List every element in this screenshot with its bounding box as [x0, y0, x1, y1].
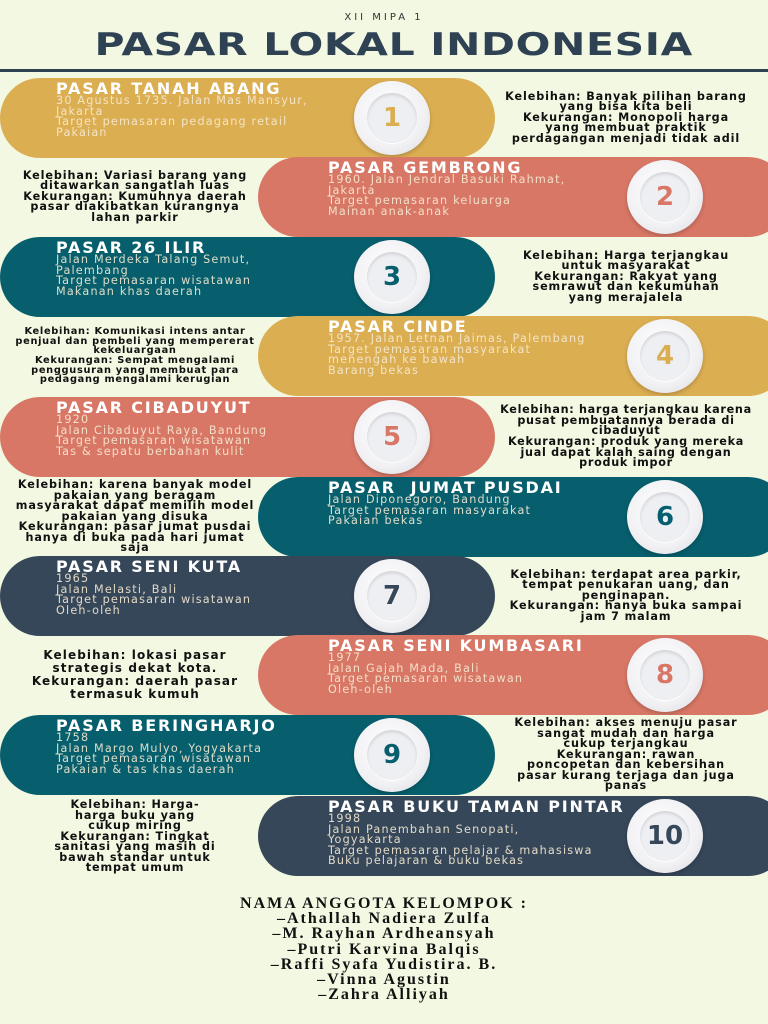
- text: pasar 6 notes: pakaian yang disuka: [61, 510, 209, 523]
- panel: pasar 10: 10: [647, 821, 683, 851]
- text: pasar 7 notes: Kekurangan: hanya buka sampai: [510, 599, 742, 612]
- text: pasar 2 notes: [23, 169, 247, 224]
- panel: pasar 4: Target pemasaran masyarakat: [328, 342, 531, 356]
- text: pasar 3 notes: yang merajalela: [569, 291, 683, 304]
- panel: pasar 5: Tas & sepatu berbahan kulit: [56, 444, 245, 458]
- text: pasar 1 notes: yang membuat praktik: [545, 121, 707, 134]
- panel: pasar 1: Target pemasaran pedagang retail: [56, 115, 287, 128]
- panel: pasar 7: 7: [383, 581, 401, 611]
- text: pasar 8 notes: Kelebihan: lokasi pasar: [43, 648, 227, 662]
- panel: pasar 10: Yogyakarta: [328, 833, 402, 846]
- panel: pasar 10: PASAR BUKU TAMAN PINTAR: [328, 797, 624, 816]
- text: pasar 5 notes: Kekurangan: produk yang mereka: [508, 435, 744, 448]
- panel: pasar 8: Target pemasaran wisatawan: [328, 672, 523, 685]
- text: pasar 10 notes: Kekurangan: Tingkat: [60, 830, 210, 843]
- text: pasar 4 notes: penjual dan pembeli yang mempererat: [15, 336, 255, 347]
- text: pasar 8 notes: strategis dekat kota.: [53, 661, 217, 675]
- panel: pasar 10: Jalan Panembahan Senopati,: [328, 822, 519, 836]
- panel: pasar 6: PASAR JUMAT PUSDAI: [328, 478, 563, 497]
- panel: pasar 1: PASAR TANAH ABANG: [56, 79, 281, 98]
- panel: pasar 7: Oleh-oleh: [56, 604, 121, 616]
- text: pasar 1 notes: yang bisa kita beli: [559, 100, 693, 113]
- panel: pasar 8: [258, 635, 768, 715]
- text: pasar 2 notes: pasar diakibatkan kurangnya: [30, 200, 240, 213]
- header rule: [0, 69, 768, 72]
- panel: pasar 4: 4: [656, 341, 674, 371]
- panel: pasar 1: 30 Agustus 1735. Jalan Mas Mansyur,: [56, 94, 308, 107]
- panel: pasar 3: PASAR 26 ILIR: [56, 238, 206, 257]
- panel: pasar 5: 1920: [56, 413, 89, 426]
- panel: pasar 1: [0, 78, 495, 158]
- panel: pasar 4: 1957. Jalan Letnan Jaimas, Palembang: [328, 332, 586, 345]
- text: pasar 9 notes: [514, 716, 738, 792]
- panel: pasar 6: 6: [656, 502, 674, 532]
- panel: pasar 9: 1758: [56, 731, 89, 744]
- text: group members: –Athallah Nadiera Zulfa: [277, 910, 491, 927]
- text: pasar 5 notes: Kelebihan: harga terjangkau karena: [500, 403, 752, 416]
- text: pasar 3 notes: semrawut dan kekumuhan: [533, 280, 719, 293]
- text: group members: –Zahra Alliyah: [318, 986, 450, 1003]
- panel: pasar 7: [0, 556, 495, 636]
- panel: pasar 4: PASAR CINDE: [328, 317, 468, 336]
- panel: pasar 2: 1960. Jalan Jendral Basuki Rahmat,: [328, 173, 565, 186]
- panel: pasar 7: Jalan Melasti, Bali: [56, 582, 177, 596]
- panel: pasar 5: Target pemasaran wisatawan: [56, 434, 251, 447]
- panel: pasar 1: Jakarta: [56, 104, 104, 118]
- panel: pasar 9: [0, 715, 495, 795]
- text: pasar 1 notes: [505, 90, 747, 145]
- text: pasar 10 notes: sanitasi yang masih di: [54, 840, 216, 853]
- text: pasar 4 notes: [15, 326, 255, 385]
- panel: pasar 7: PASAR SENI KUTA: [56, 557, 242, 576]
- panel: pasar 9: PASAR BERINGHARJO: [56, 716, 277, 735]
- text: pasar 5 notes: jual dapat kalah saing dengan: [520, 446, 731, 459]
- text: group members: –Vinna Agustin: [317, 971, 451, 988]
- panel: pasar 2: Mainan anak-anak: [328, 204, 450, 218]
- text: pasar 8 notes: [32, 648, 238, 701]
- text: pasar 7 notes: [510, 568, 742, 623]
- panel: pasar 4: Barang bekas: [328, 364, 419, 376]
- panel: pasar 3: 3: [383, 262, 401, 292]
- text: group members: [240, 895, 528, 1003]
- text: pasar 10 notes: harga buku yang: [75, 809, 195, 822]
- text: pasar 9 notes: cukup terjangkau: [563, 737, 689, 750]
- text: pasar 7 notes: tempat penukaran uang, dan: [522, 578, 730, 591]
- panel: pasar 6: Pakaian bekas: [328, 514, 423, 527]
- text: pasar 9 notes: Kelebihan: akses menuju pasar: [514, 716, 738, 729]
- text: pasar 1 notes: Kekurangan: Monopoli harga: [523, 111, 729, 124]
- panel: pasar 10: 1998: [328, 812, 361, 825]
- text: pasar 6 notes: masyarakat dapat memilih model: [16, 499, 254, 512]
- panel: pasar 5: PASAR CIBADUYUT: [56, 398, 251, 417]
- panel: pasar 10: [258, 796, 768, 876]
- panel: pasar 8: 8: [656, 660, 674, 690]
- text: pasar 7 notes: penginapan.: [582, 589, 670, 602]
- text: pasar 7 notes: Kelebihan: terdapat area parkir,: [510, 568, 742, 581]
- panel: pasar 7: 1965: [56, 572, 89, 585]
- text: pasar 4 notes: kekeluargaan: [93, 345, 177, 356]
- text: pasar 3 notes: untuk masyarakat: [561, 259, 691, 272]
- text: pasar 6 notes: Kekurangan: pasar jumat pusdai: [19, 520, 251, 533]
- text: pasar 7 notes: jam 7 malam: [581, 610, 671, 623]
- panel: pasar 5: Jalan Cibaduyut Raya, Bandung: [56, 424, 267, 436]
- panel: pasar 2: [258, 157, 768, 237]
- text: pasar 3 notes: Kekurangan: Rakyat yang: [534, 270, 718, 283]
- text: pasar 9 notes: poncopetan dan kebersihan: [527, 758, 725, 771]
- text: pasar 2 notes: Kekurangan: Kumuhnya daerah: [23, 190, 247, 203]
- text: pasar 8 notes: Kekurangan: daerah pasar: [32, 674, 238, 688]
- subtitle: XII MIPA 1: [344, 12, 424, 23]
- panel: pasar 2: Target pemasaran keluarga: [328, 194, 511, 207]
- text: pasar 10 notes: tempat umum: [86, 861, 184, 874]
- panel: pasar 6: [258, 477, 768, 557]
- text: pasar 5 notes: pusat pembuatannya berada di: [517, 414, 735, 427]
- text: pasar 10 notes: bawah standar untuk: [59, 851, 211, 864]
- text: pasar 5 notes: produk impor: [579, 456, 673, 469]
- panel: pasar 5: 5: [383, 422, 401, 452]
- text: pasar 1 notes: Kelebihan: Banyak pilihan barang: [505, 90, 747, 103]
- text: pasar 5 notes: [500, 403, 752, 469]
- panel: pasar 8: Oleh-oleh: [328, 682, 393, 696]
- text: pasar 6 notes: Kelebihan: karena banyak model: [18, 478, 252, 491]
- panel: pasar 9: Jalan Margo Mulyo, Yogyakarta: [56, 742, 262, 754]
- text: pasar 10 notes: Kelebihan: Harga-: [70, 798, 200, 811]
- text: group members: –M. Rayhan Ardheansyah: [272, 925, 496, 942]
- text: group members: –Putri Karvina Balqis: [287, 941, 481, 958]
- panel: pasar 3: [0, 237, 495, 317]
- text: pasar 4 notes: Kelebihan: Komunikasi intens antar: [24, 326, 246, 337]
- panel: pasar 9: 9: [383, 740, 401, 770]
- panel: pasar 4: menengah ke bawah: [328, 353, 465, 366]
- panel: pasar 6: Jalan Diponegoro, Bandung: [328, 493, 511, 506]
- text: pasar 9 notes: Kekurangan: rawan: [557, 748, 695, 761]
- panel: pasar 2: 2: [656, 182, 674, 212]
- panel: pasar 2: PASAR GEMBRONG: [328, 158, 522, 177]
- panel: pasar 3: Makanan khas daerah: [56, 284, 202, 298]
- panel: pasar 9: Target pemasaran wisatawan: [56, 752, 251, 765]
- text: pasar 4 notes: Kekurangan: Sempat mengalami: [35, 355, 235, 366]
- text: group members: –Raffi Syafa Yudistira. B.: [271, 956, 497, 973]
- panel: pasar 3: Palembang: [56, 264, 129, 276]
- text: pasar 5 notes: cibaduyut: [592, 424, 660, 437]
- text: pasar 2 notes: ditawarkan sangatlah luas: [40, 179, 230, 192]
- text: pasar 9 notes: sangat mudah dan harga: [537, 727, 715, 740]
- text: pasar 4 notes: pedagang mengalami kerugian: [40, 374, 230, 385]
- text: pasar 6 notes: pakaian yang beragam: [54, 489, 216, 502]
- panel: pasar 8: PASAR SENI KUMBASARI: [328, 636, 584, 655]
- text: pasar 2 notes: lahan parkir: [91, 211, 179, 224]
- title: PASAR LOKAL INDONESIA: [95, 27, 693, 63]
- panel: pasar 4: [258, 316, 768, 396]
- panel: pasar 8: Jalan Gajah Mada, Bali: [328, 662, 480, 674]
- panel: pasar 1: 1: [383, 103, 401, 133]
- panel: pasar 8: 1977: [328, 651, 361, 664]
- text: pasar 9 notes: panas: [605, 779, 647, 792]
- text: group members: NAMA ANGGOTA KELOMPOK :: [240, 895, 528, 912]
- text: pasar 1 notes: perdagangan menjadi tidak adil: [512, 132, 740, 145]
- text: pasar 3 notes: [523, 249, 729, 304]
- text: pasar 8 notes: termasuk kumuh: [70, 687, 200, 701]
- panel: pasar 5: [0, 397, 495, 477]
- panel: pasar 3: Target pemasaran wisatawan: [56, 274, 251, 287]
- text: pasar 6 notes: saja: [120, 541, 150, 554]
- panel: pasar 10: Buku pelajaran & buku bekas: [328, 854, 524, 867]
- panel: pasar 10: Target pemasaran pelajar & mahasiswa: [328, 844, 593, 856]
- panel: pasar 1: Pakaian: [56, 126, 108, 138]
- text: pasar 10 notes: cukup miring: [88, 819, 182, 832]
- panel: pasar 9: Pakaian & tas khas daerah: [56, 762, 235, 776]
- panel: pasar 2: Jakarta: [328, 184, 376, 196]
- text: pasar 10 notes: [54, 798, 216, 874]
- text: pasar 6 notes: hanya di buka pada hari jumat: [25, 531, 245, 544]
- text: pasar 4 notes: penggusuran yang membuat para: [31, 365, 239, 376]
- text: pasar 9 notes: pasar kurang terjaga dan juga: [517, 769, 735, 782]
- text: pasar 3 notes: Kelebihan: Harga terjangkau: [523, 249, 729, 262]
- panel: pasar 6: Target pemasaran masyarakat: [328, 504, 531, 516]
- panel: pasar 3: Jalan Merdeka Talang Semut,: [56, 253, 250, 266]
- panel: pasar 7: Target pemasaran wisatawan: [56, 593, 251, 606]
- text: pasar 6 notes: [16, 478, 254, 554]
- text: pasar 2 notes: Kelebihan: Variasi barang yang: [23, 169, 247, 182]
